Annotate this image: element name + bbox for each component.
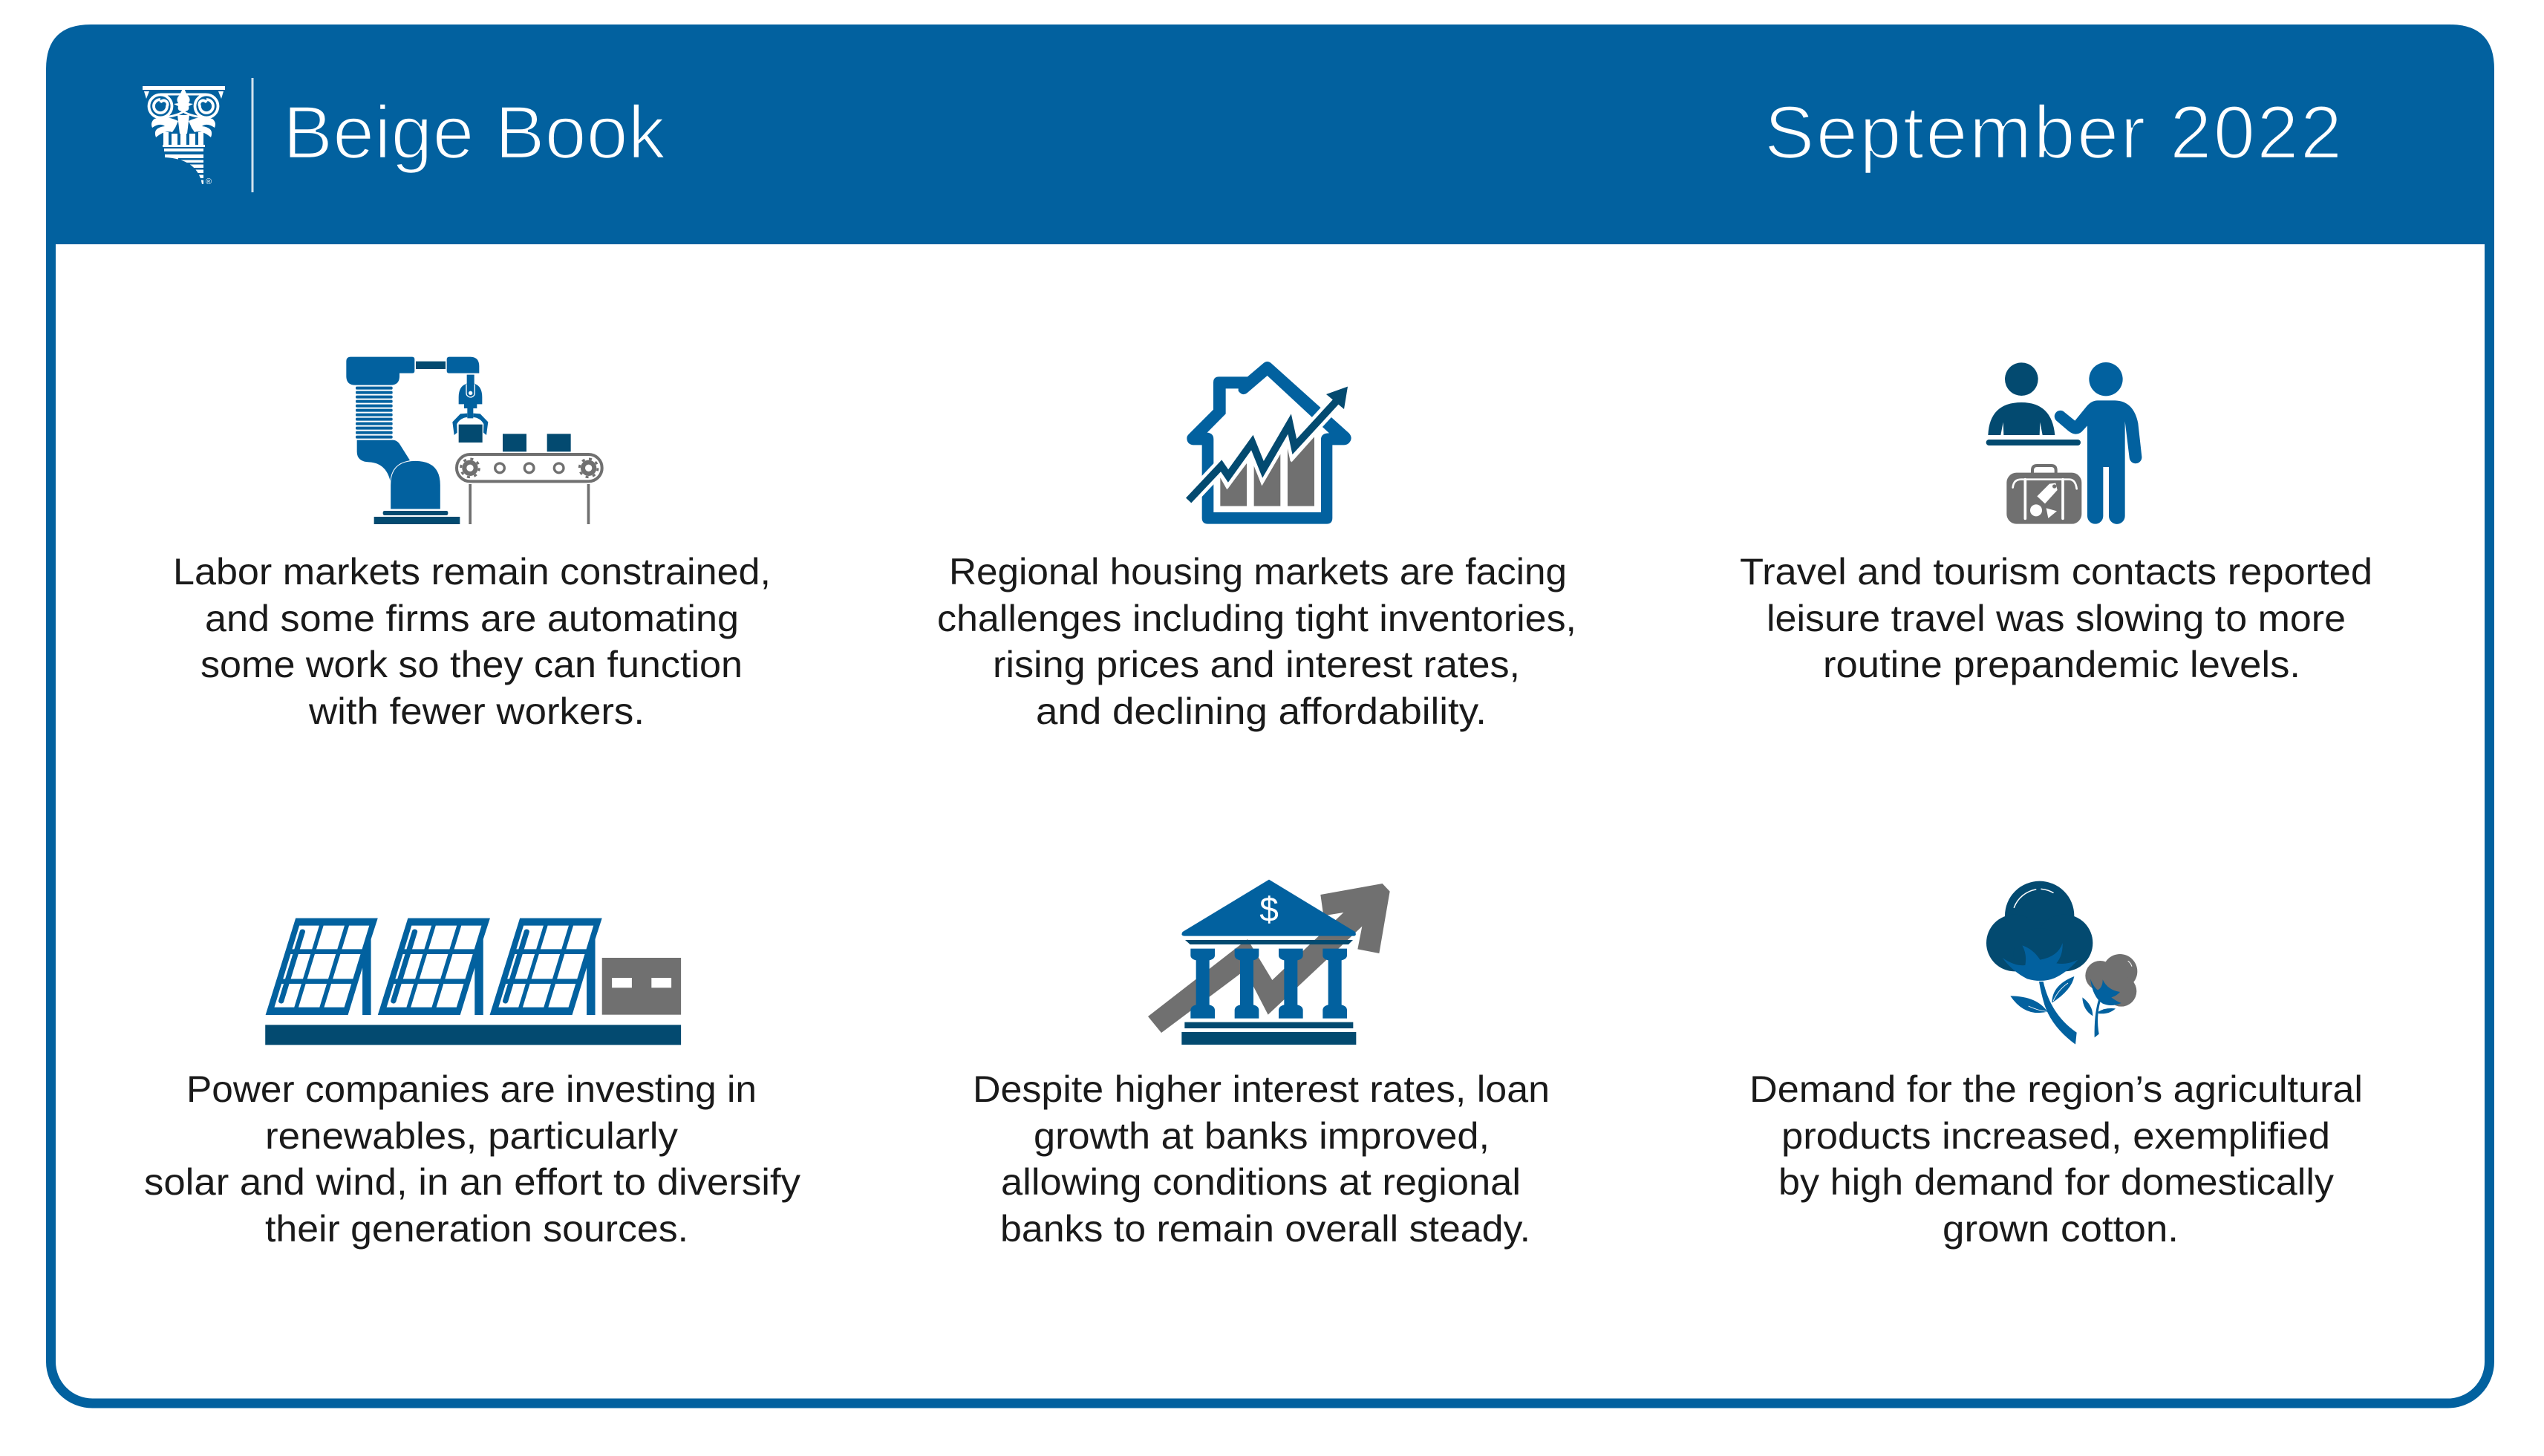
text: housing: Regional housing markets are facing [949,551,1567,592]
icon: house with rising chart [1187,362,1351,524]
text: agriculture: grown cotton. [1943,1208,2179,1250]
text: travel: routine prepandemic levels. [1823,644,2300,685]
icon: traveller at desk with suitcase [1986,362,2142,524]
registered mark: ® [206,177,212,186]
text: agriculture: by high demand for domestically [1778,1161,2334,1203]
text: power: renewables, particularly [265,1115,678,1157]
icon: cotton plants [1986,881,2137,1045]
icon: robot arm and conveyor [346,357,602,524]
icon: solar panels and battery [265,918,681,1045]
text: labor markets: and some firms are automating [205,598,739,639]
text: agriculture [1749,1068,2363,1250]
text: power: their generation sources. [265,1208,688,1250]
text: labor markets: some work so they can function [200,644,743,685]
header band [46,25,2494,244]
panel: banks [973,880,1550,1250]
text: travel [1740,551,2372,685]
icon: Federal Reserve column logo [143,86,225,184]
text: banks: banks to remain overall steady. [1000,1208,1530,1250]
text: banks: growth at banks improved, [1034,1115,1490,1157]
panel: housing [937,362,1576,732]
panel: agriculture [1749,881,2363,1250]
text: housing: rising prices and interest rates, [993,644,1520,685]
text: travel: Travel and tourism contacts reported [1740,551,2372,592]
text: banks [973,1068,1550,1250]
icon: bank with rising arrow: $ [1259,890,1279,929]
panel: power [144,918,800,1250]
text: agriculture: Demand for the region’s agricultural [1749,1068,2363,1110]
logo divider [251,78,254,192]
text: banks: Despite higher interest rates, loan [973,1068,1550,1110]
text: labor markets: with fewer workers. [308,691,645,732]
text: banks: allowing conditions at regional [1001,1161,1521,1203]
date: September 2022 [1764,91,2342,174]
text: labor markets [173,551,771,732]
text: housing: and declining affordability. [1036,691,1487,732]
title: Beige Book [283,91,665,174]
text: agriculture: products increased, exemplified [1781,1115,2330,1157]
icon: bank with rising arrow [1148,880,1390,1045]
panel: labor markets [173,357,771,732]
text: housing [937,551,1576,732]
text: travel: leisure travel was slowing to more [1767,598,2346,639]
panel: travel [1740,362,2372,685]
text: power: solar and wind, in an effort to diversify [144,1161,800,1203]
text: power [144,1068,800,1250]
text: housing: challenges including tight inventories, [937,598,1576,639]
text: power: Power companies are investing in [186,1068,757,1110]
text: labor markets: Labor markets remain constrained, [173,551,771,592]
